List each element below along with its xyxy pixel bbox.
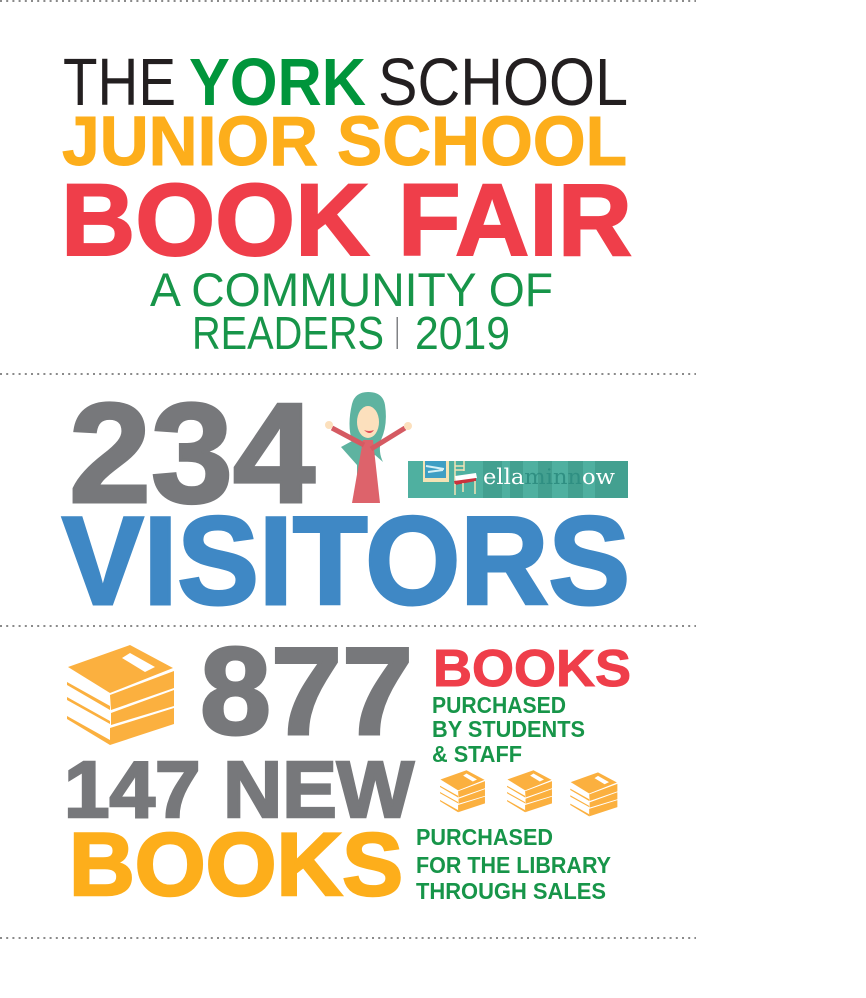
- text: purchased by students and staff: PURCHASED: [432, 692, 566, 718]
- text: purchased by students and staff: & STAFF: [432, 741, 522, 767]
- logo: ellaminnow: [408, 461, 628, 498]
- text: purchased for the library through sales: PURCHASED: [416, 824, 553, 850]
- heading: books: BOOKS: [433, 640, 631, 698]
- heading: Book Fair: BOOK FAIR: [61, 163, 632, 277]
- stat: 877: 877: [200, 623, 413, 761]
- title: The York School: THE: [63, 45, 176, 120]
- subtitle: A Community of Readers 2019: READERS: [192, 307, 384, 359]
- subtitle: A Community of Readers 2019: A COMMUNITY OF: [150, 263, 553, 316]
- icons: three small book stacks: [440, 770, 617, 816]
- text: purchased for the library through sales: [416, 824, 611, 904]
- stat: 234: 234: [69, 374, 315, 533]
- title: The York School: [63, 45, 628, 120]
- subtitle: A Community of Readers 2019: 2019: [415, 307, 510, 359]
- text: purchased for the library through sales: THROUGH SALES: [416, 878, 606, 904]
- icon: large stack of books: [67, 645, 174, 745]
- illustration: girl with raised arms: [325, 392, 412, 503]
- title: The York School: SCHOOL: [378, 45, 628, 120]
- stat: 147 new: 147 NEW: [64, 745, 415, 834]
- text: purchased by students and staff: [432, 692, 585, 767]
- subtitle: A Community of Readers 2019: [150, 263, 553, 359]
- logo: ellaminnow: ellaminnow: [483, 465, 615, 489]
- heading: orange books: BOOKS: [69, 814, 403, 914]
- title: The York School: YORK: [189, 45, 366, 120]
- text: purchased for the library through sales: FOR THE LIBRARY: [416, 852, 611, 878]
- heading: Junior School: JUNIOR SCHOOL: [62, 102, 627, 180]
- stat: visitors: VISITORS: [62, 492, 630, 631]
- text: purchased by students and staff: BY STUDENTS: [432, 716, 585, 742]
